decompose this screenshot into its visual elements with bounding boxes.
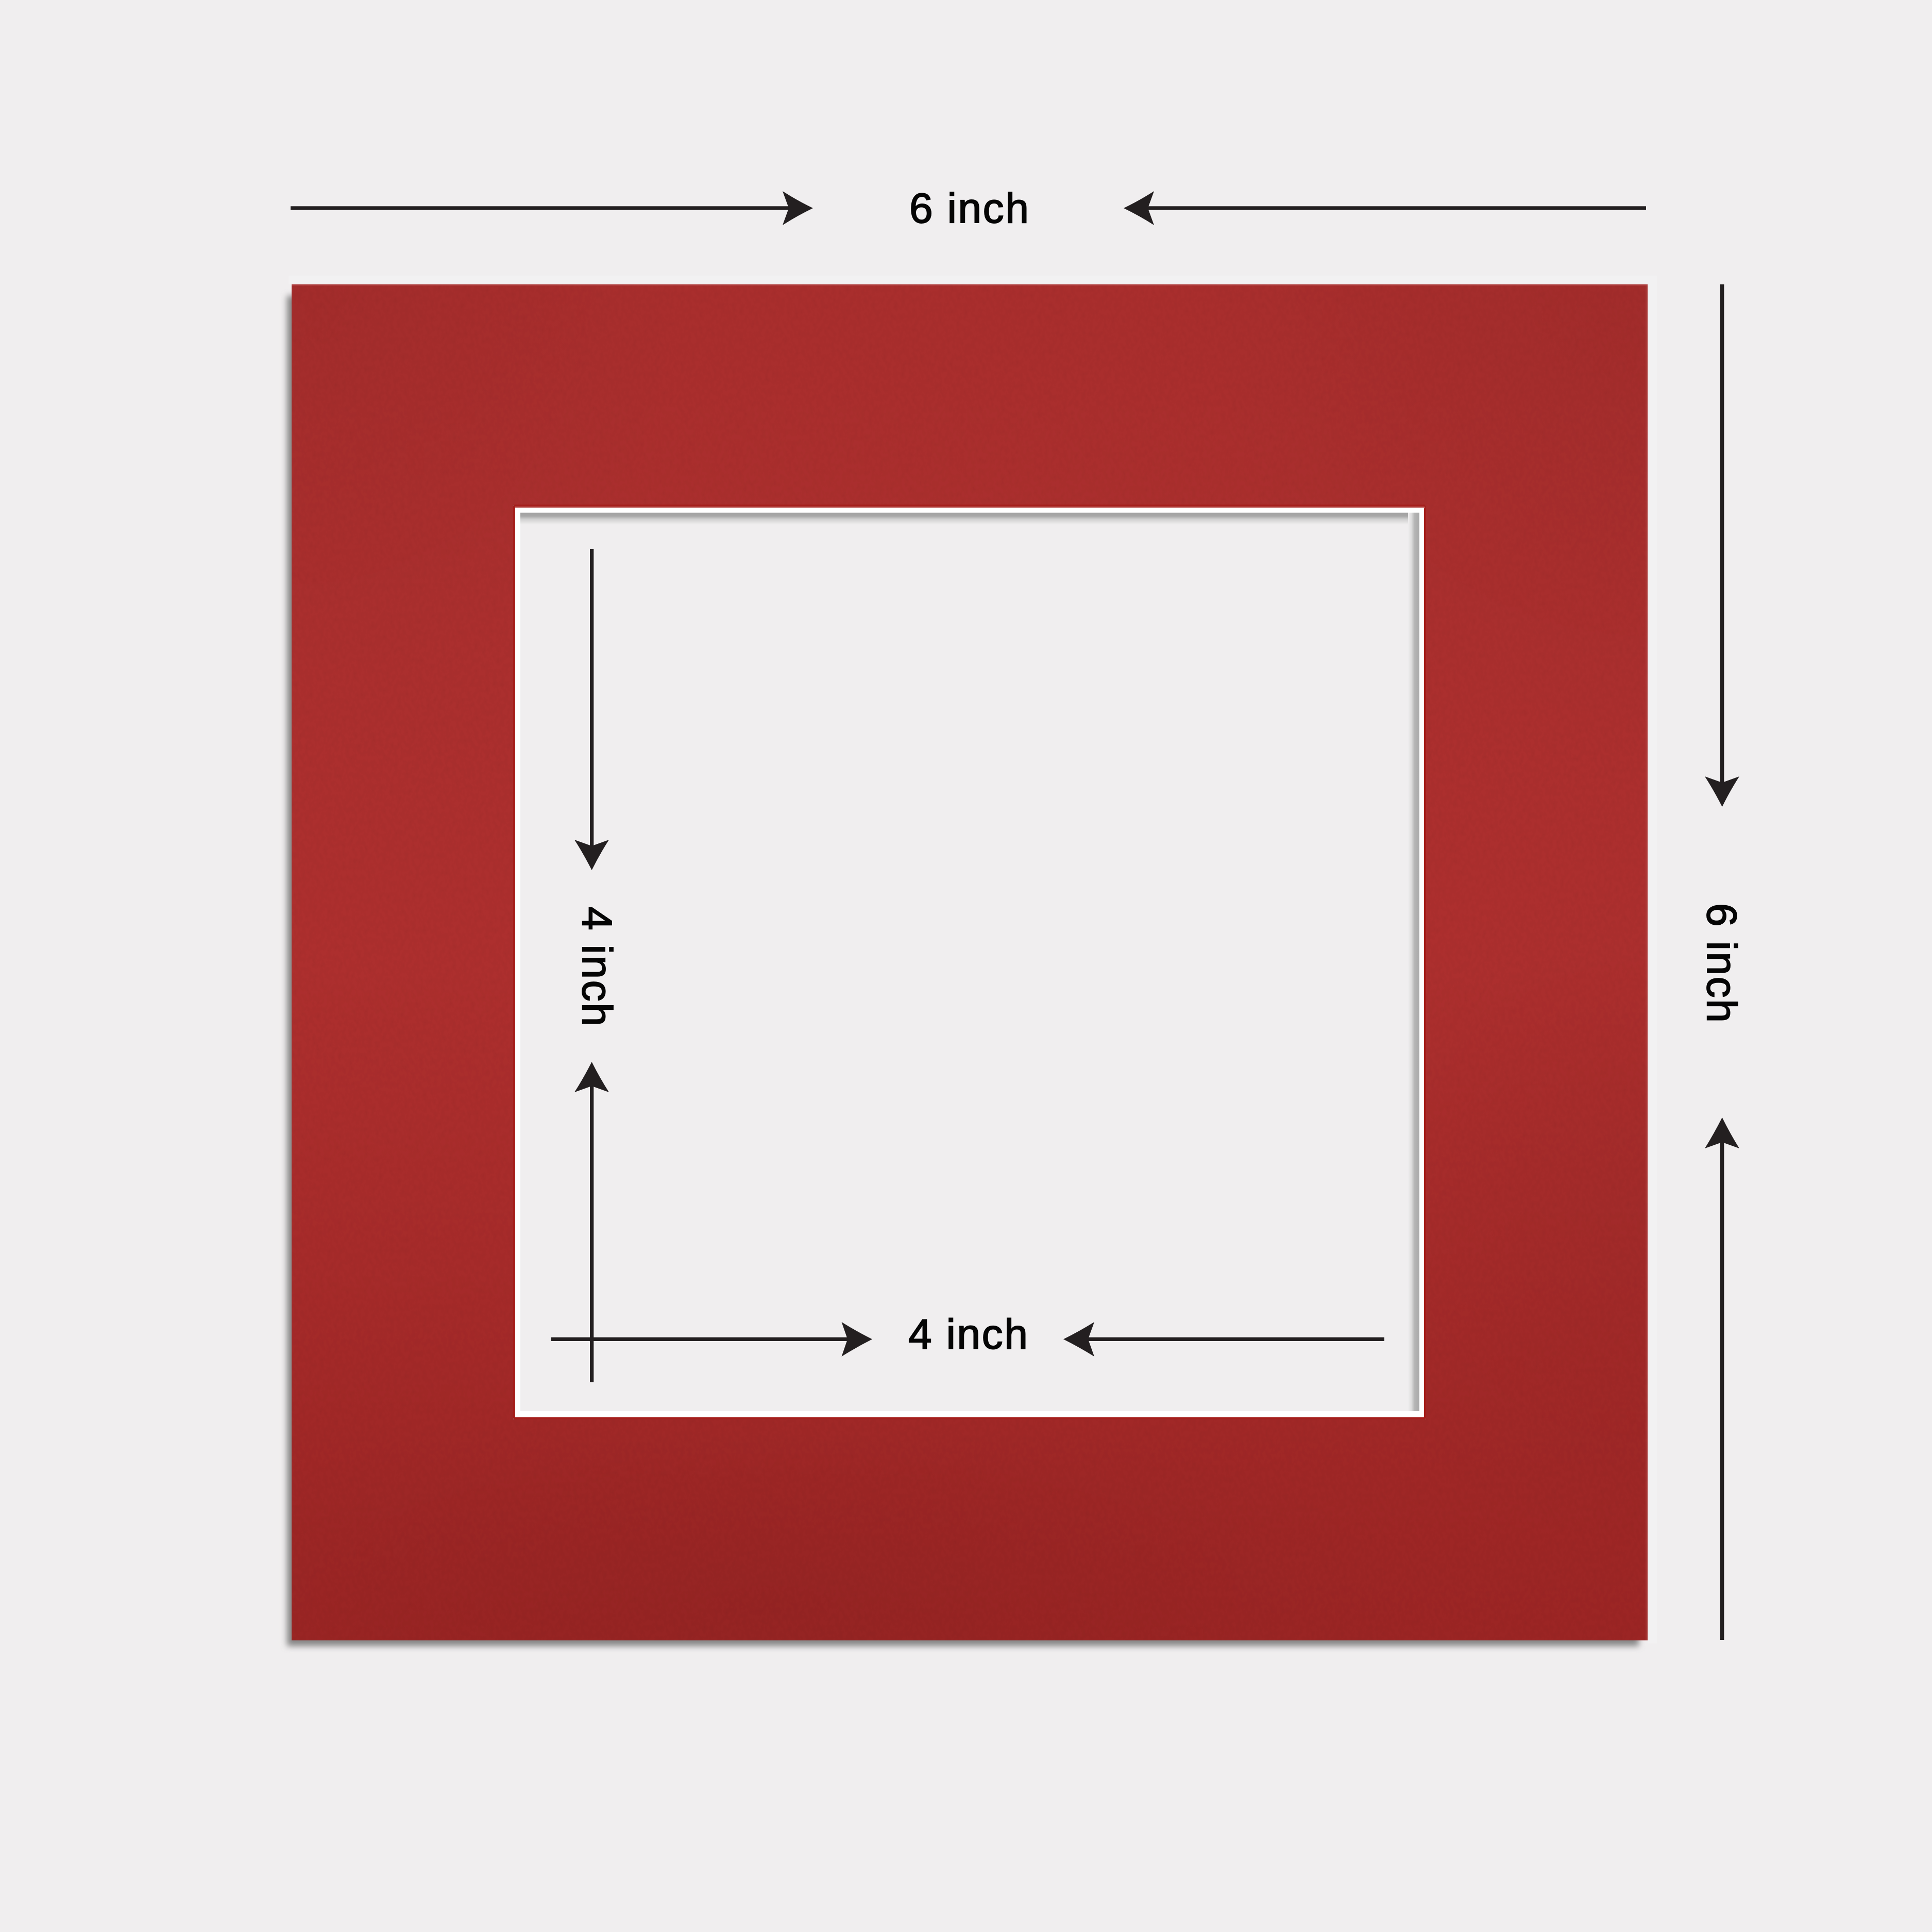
bevel pink upper edge	[515, 507, 1425, 508]
panel: red mat board with square window	[287, 276, 1657, 1646]
mat surface	[292, 284, 1648, 1640]
label: right 6 inch: 6 inch	[1698, 903, 1745, 1024]
window: bevel and opening	[513, 505, 1426, 1419]
arrow: top right, pointing left	[1124, 191, 1646, 225]
mat tonal shading	[292, 284, 1648, 1640]
mat drop shadow	[287, 296, 1639, 1646]
opening	[520, 513, 1419, 1411]
label: inner left 4 inch: 4 inch	[573, 907, 620, 1027]
label: inner bottom 4 inch: 4 inch	[908, 1311, 1029, 1358]
arrow: right side, pointing down	[1705, 284, 1739, 807]
bevel dark red outline	[513, 505, 1426, 1419]
arrow: right side, pointing up	[1705, 1117, 1739, 1640]
arrow: top left, pointing right	[291, 191, 813, 225]
inner right shadow	[1408, 513, 1419, 1411]
label: top 6 inch: 6 inch	[909, 185, 1030, 232]
arrow: inner bottom, pointing left	[1063, 1322, 1384, 1357]
arrow: inner left, pointing down	[574, 549, 609, 870]
inner top shadow	[520, 513, 1419, 524]
white bevel	[515, 508, 1424, 1417]
arrow: inner left, pointing up	[574, 1062, 609, 1382]
arrow: inner bottom, pointing right	[551, 1322, 872, 1357]
mat highlight glow, top and right	[289, 276, 1657, 1643]
